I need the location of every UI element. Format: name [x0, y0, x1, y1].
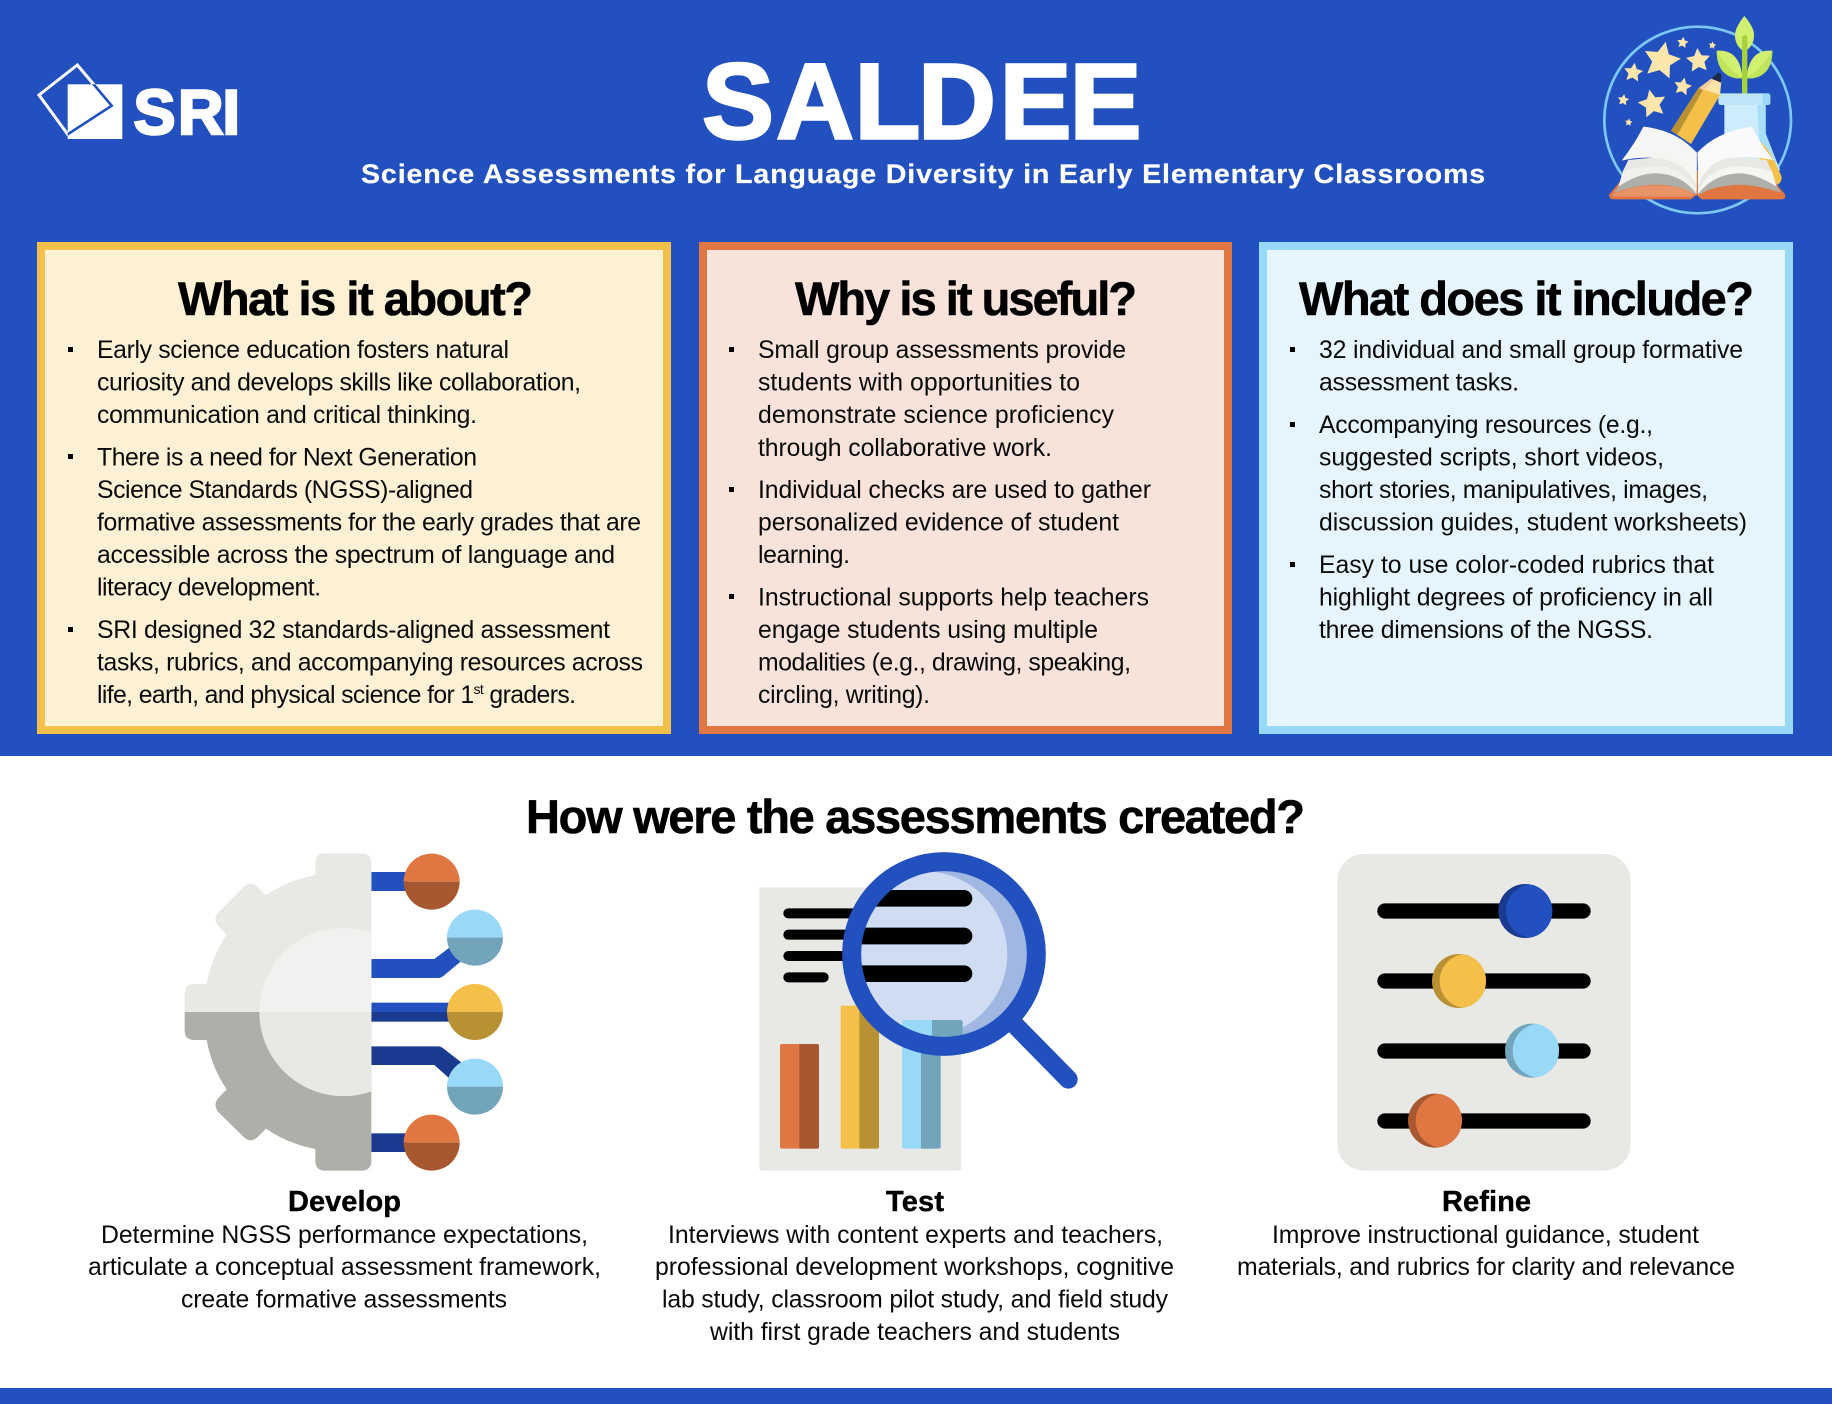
step: refine: materials, and rubrics for clarity and relevance: [1237, 1254, 1735, 1281]
bullet list: Individual checks are used to gather: [758, 477, 1151, 504]
step: refine: [1237, 1186, 1735, 1281]
bullet list: short stories, manipulatives, images,: [1319, 477, 1708, 504]
title: SALDEE: [702, 40, 1142, 162]
bullet list: assessment tasks.: [1319, 370, 1519, 397]
bullet list: Instructional supports help teachers: [758, 584, 1149, 611]
bullet list: suggested scripts, short videos,: [1319, 444, 1664, 472]
bullet list: through collaborative work.: [758, 435, 1052, 462]
step: test: professional development workshops, cognitive: [655, 1254, 1174, 1281]
bullet list: Early science education fosters natural: [97, 337, 509, 364]
bullet list: 32 individual and small group formative: [1319, 337, 1743, 364]
bullet list: literacy development.: [97, 575, 321, 602]
panel: why is it useful: [703, 246, 1228, 730]
step: refine: Refine: [1442, 1186, 1531, 1218]
SRI logo: SRI: [134, 78, 240, 148]
step: test: Interviews with content experts and teachers,: [668, 1222, 1163, 1249]
bullet list: SRI designed 32 standards-aligned assessment: [97, 617, 610, 644]
bullet list: There is a need for Next Generation: [97, 444, 477, 471]
bullet list: communication and critical thinking.: [97, 402, 477, 429]
panel: what is it about: [41, 246, 667, 730]
bullet list: Small group assessments provide: [758, 337, 1126, 364]
bullet list: [68, 337, 643, 709]
footer band: [0, 1388, 1832, 1404]
step: develop: Determine NGSS performance expectations,: [101, 1222, 588, 1249]
heading: Why is it useful?: [795, 272, 1137, 325]
bullet list: [1290, 337, 1747, 644]
step: develop: [88, 1186, 601, 1314]
bullet list: highlight degrees of proficiency in all: [1319, 585, 1713, 612]
bullet list: demonstrate science proficiency: [758, 402, 1115, 429]
panel: what does it include: [1263, 246, 1789, 730]
SRI logo: [39, 65, 240, 148]
section heading: How were the assessments created?: [526, 790, 1305, 843]
step: test: [655, 1186, 1174, 1346]
icon: book, pencil, flask and stars: [1604, 16, 1791, 213]
bullet list: life, earth, and physical science for 1: [97, 682, 474, 709]
heading: What is it about?: [178, 272, 533, 325]
step: test: with first grade teachers and students: [709, 1319, 1120, 1346]
icon: test magnifier over report: [759, 862, 1068, 1171]
step: test: Test: [886, 1186, 944, 1218]
bullet list: Accompanying resources (e.g.,: [1319, 412, 1653, 439]
bullet list: accessible across the spectrum of language and: [97, 542, 615, 569]
step: refine: Improve instructional guidance, student: [1272, 1222, 1699, 1249]
bullet list: modalities (e.g., drawing, speaking,: [758, 650, 1131, 677]
bullet list: graders.: [483, 682, 576, 709]
step: develop: articulate a conceptual assessment framework,: [88, 1254, 601, 1281]
bullet list: Science Standards (NGSS)-aligned: [97, 477, 473, 504]
step: develop: create formative assessments: [181, 1286, 507, 1314]
step: develop: Develop: [288, 1186, 401, 1218]
bullet list: curiosity and develops skills like collaboration,: [97, 370, 581, 397]
header band: [0, 0, 1832, 756]
bullet list: formative assessments for the early grades that are: [97, 510, 641, 536]
bullet list: learning.: [758, 542, 850, 569]
bullet list: tasks, rubrics, and accompanying resources across: [97, 650, 643, 677]
bullet list: personalized evidence of student: [758, 510, 1119, 536]
bullet list: engage students using multiple: [758, 617, 1098, 644]
bullet list: [729, 337, 1151, 709]
bullet list: discussion guides, student worksheets): [1319, 510, 1747, 537]
bullet list: students with opportunities to: [758, 370, 1080, 397]
bullet list: Easy to use color-coded rubrics that: [1319, 552, 1714, 579]
step: test: lab study, classroom pilot study, and field study: [662, 1286, 1169, 1314]
icon: refine sliders: [1337, 854, 1631, 1171]
bullet list: three dimensions of the NGSS.: [1319, 617, 1653, 644]
icon: develop gear: [185, 853, 503, 1171]
bullet list: st: [474, 681, 484, 697]
heading: What does it include?: [1299, 272, 1754, 325]
bullet list: circling, writing).: [758, 682, 930, 709]
subtitle: Science Assessments for Language Diversity in Early Elementary Classrooms: [361, 159, 1486, 189]
